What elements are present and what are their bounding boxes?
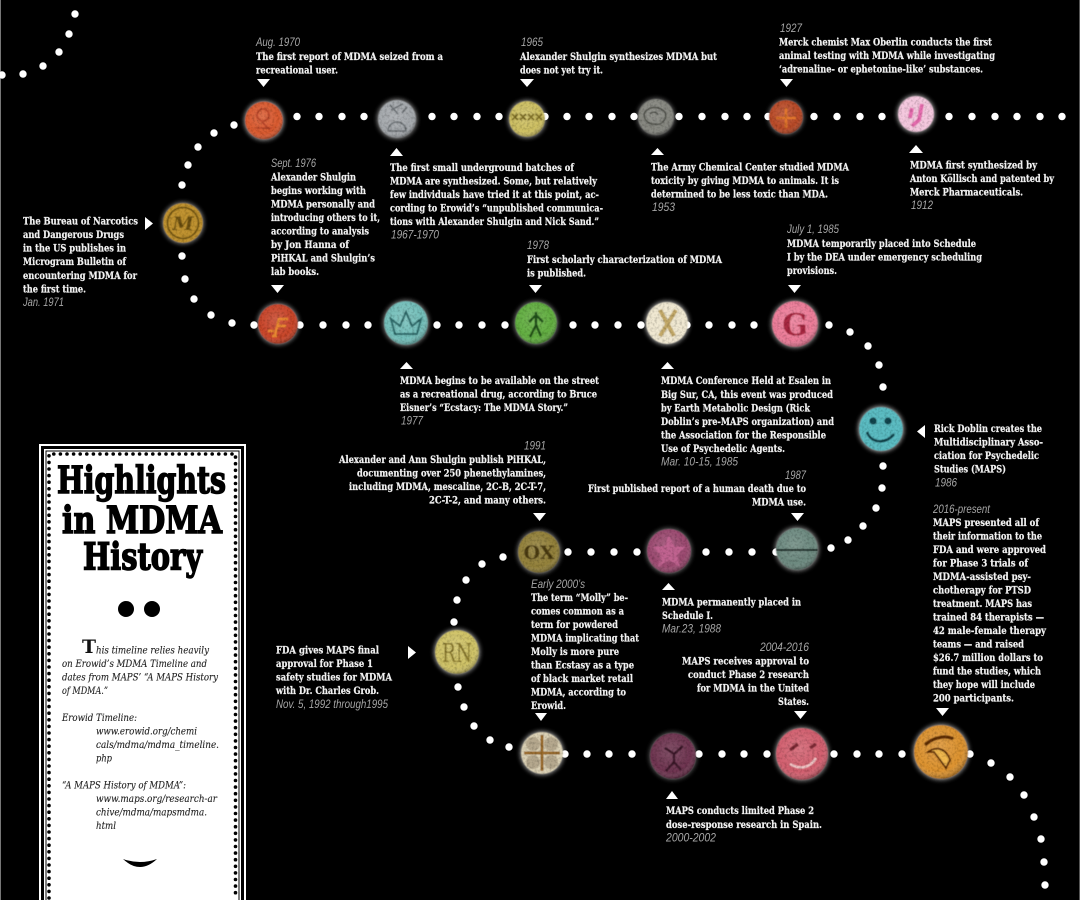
pill: teal smiley	[858, 406, 904, 452]
event: Jan. 1971: in the US publishes in	[23, 242, 126, 254]
event: Mar. 10-15, 1985	[661, 362, 835, 468]
pill: teal crown	[383, 300, 429, 346]
event: Mar. 10-15, 1985: Big Sur, CA, this event was produced	[661, 389, 834, 401]
event: Sept. 1976: introducing others to it,	[271, 212, 380, 224]
event: 1991: documenting over 250 phenethylamines,	[357, 468, 546, 480]
intro text: his timeline relies heavily	[96, 644, 210, 656]
event: 1912: Merck Pharmaceuticals.	[910, 186, 1023, 198]
event: 1965: 1965	[521, 35, 543, 49]
event: 1967-1970: cording to Erowid’s “unpublished communica-	[390, 202, 603, 214]
event: 1953: 1953	[652, 200, 675, 214]
event: 1967-1970: tions with Alexander Shulgin and Nick Sand.”	[390, 216, 599, 228]
title	[57, 458, 226, 578]
event: 1986: Multidisciplinary Asso-	[934, 436, 1043, 448]
event: 2004-2016: for MDMA in the United	[697, 682, 810, 694]
event: 1977: Eisner’s “Ecstacy: The MDMA Story.”	[400, 402, 568, 414]
event: Mar. 23, 1988: Schedule I.	[662, 610, 713, 622]
pill: cream X	[645, 301, 689, 345]
event: Aug. 1970: Aug. 1970	[255, 35, 300, 49]
pill: dark purple figure	[649, 732, 697, 780]
event: Aug. 1970: recreational user.	[256, 64, 338, 76]
source: Erowid timeline: www.erowid.org/chemi	[96, 726, 197, 738]
event: July 1, 1985: provisions.	[787, 265, 837, 277]
event: Early 2000's: Molly is more pure	[531, 646, 619, 658]
title: History	[83, 534, 203, 578]
event: Early 2000's: term for powdered	[531, 619, 619, 631]
event: 2016-present: treatment. MAPS has	[933, 598, 1032, 610]
event: 1986: 1986	[935, 476, 957, 490]
source: Erowid timeline: php	[96, 752, 112, 764]
event: Jan. 1971: encountering MDMA for	[23, 270, 137, 282]
event: 1967-1970: 1967-1970	[391, 228, 439, 242]
event: 1991: 1991	[524, 438, 546, 452]
icon: smile	[123, 859, 157, 867]
intro text: dates from MAPS’ “A MAPS History	[62, 672, 219, 684]
event: Mar. 10-15, 1985: Use of Psychedelic Agents.	[661, 443, 785, 455]
event: 2004-2016: conduct Phase 2 research	[688, 669, 809, 681]
event: 1927: ‘adrenaline- or ephetonine-like’ substances.	[779, 64, 983, 76]
event: 2004-2016	[682, 640, 810, 719]
event: 1986: Rick Doblin creates the	[934, 423, 1042, 435]
event: Sept. 1976	[270, 156, 380, 293]
event: 1927: Merck chemist Max Oberlin conducts the first	[779, 36, 992, 48]
event: Sept. 1976: MDMA personally and	[271, 198, 376, 210]
event: Nov. 5, 1992 through 1995	[275, 644, 416, 711]
pill: purple star	[646, 528, 692, 574]
event: 1965	[519, 35, 717, 87]
event: 2016-present: $26.7 million dollars to	[933, 652, 1043, 664]
pill: grey cat	[377, 99, 417, 139]
event: 1991: Alexander and Ann Shulgin publish PiHKAL,	[338, 454, 546, 466]
event: 1927	[779, 21, 996, 87]
pill: red cross	[768, 99, 804, 135]
source: A MAPS History of MDMA: html	[96, 820, 116, 832]
event: Jan. 1971: the first time.	[23, 284, 86, 296]
pill: yellow RN: RN	[442, 639, 472, 669]
event: 2016-present: teams — and raised	[933, 638, 1025, 650]
pill: olive OX	[517, 530, 561, 574]
event: Nov. 5, 1992 through 1995: approval for Phase 1	[276, 658, 373, 670]
event: 1987	[588, 468, 807, 521]
event: 1977	[400, 362, 599, 428]
event: 1967-1970: The first small underground batches of	[390, 162, 575, 174]
event: 1967-1970: MDMA are synthesized. Some, but relatively	[390, 176, 598, 188]
event: Mar. 10-15, 1985: Mar. 10-15, 1985	[661, 454, 738, 468]
event: 2000-2002: dose-response research in Spain.	[666, 819, 822, 831]
event: Aug. 1970: The first report of MDMA seized from a	[256, 51, 443, 63]
event: 1991: including MDMA, mescaline, 2C-B, 2C-T-7,	[349, 481, 546, 493]
event: Aug. 1970	[255, 35, 443, 87]
event: Early 2000's: MDMA implicating that	[531, 632, 639, 644]
event: 1965: Alexander Shulgin synthesizes MDMA but	[519, 51, 717, 63]
event: 1986: Studies (MAPS)	[934, 464, 1006, 476]
event: Nov. 5, 1992 through 1995: Nov. 5, 1992 through1995	[276, 697, 388, 711]
pill: gold M	[162, 202, 204, 244]
source: A MAPS History of MDMA: chive/mdma/mapsmdma.	[96, 806, 207, 818]
event: 1978: 1978	[527, 238, 549, 252]
event: 2016-present: for Phase 3 trials of	[933, 558, 1029, 570]
event: Mar. 10-15, 1985: Doblin’s pre-MAPS organization) and	[661, 416, 835, 428]
event: Sept. 1976: by Jon Hanna of	[271, 239, 350, 251]
panel: highlights in MDMA history	[39, 444, 246, 900]
event: Mar. 23, 1988: MDMA permanently placed in	[662, 596, 801, 608]
event: 2016-present: they hope will include	[933, 679, 1035, 691]
pill: grey-green scored	[775, 527, 819, 571]
event: 1978	[527, 238, 723, 293]
event: Nov. 5, 1992 through 1995: FDA gives MAPS final	[276, 644, 379, 656]
event: 2016-present: trained 84 therapists —	[933, 612, 1044, 624]
pill: orange dolphin	[913, 724, 969, 780]
event: 1977: 1977	[401, 414, 424, 428]
event: 1991	[338, 438, 546, 521]
pill: pink G	[771, 300, 819, 348]
pill: pink rabbit	[897, 95, 935, 133]
event: Nov. 5, 1992 through 1995: safety studies for MDMA	[276, 672, 393, 684]
icon: smiley eyes	[118, 601, 160, 617]
event: Nov. 5, 1992 through 1995: with Dr. Charles Grob.	[275, 685, 379, 697]
title: Highlights	[57, 458, 226, 502]
event: 1953: The Army Chemical Center studied MDMA	[651, 162, 850, 174]
event: 2000-2002: MAPS conducts limited Phase 2	[666, 805, 814, 817]
event: Early 2000's: comes common as a	[531, 606, 624, 618]
event: Jan. 1971: Microgram Bulletin of	[23, 256, 127, 268]
event: 2000-2002	[665, 791, 822, 844]
event: 1953	[651, 148, 850, 214]
event: 1967-1970	[390, 148, 603, 242]
pill: pink G: G	[782, 308, 808, 343]
event: Sept. 1976: lab books.	[271, 266, 319, 278]
pill: olive OX: OX	[524, 542, 555, 564]
pill: tan clover	[520, 731, 564, 775]
pill: orange music note	[257, 303, 299, 345]
event: 1912: 1912	[911, 198, 933, 212]
event: 1927: 1927	[780, 21, 803, 35]
source: Erowid timeline: cals/mdma/mdma_timeline.	[96, 739, 219, 751]
event: 1977: as a recreational drug, according to Bruce	[400, 388, 597, 400]
event: 1967-1970: few individuals have tried it at this point, ac-	[390, 189, 599, 201]
event: Jan. 1971: and Dangerous Drugs	[23, 229, 124, 241]
intro text	[62, 636, 219, 697]
event: 2016-present: chotherapy for PTSD	[933, 584, 1031, 596]
intro text: of MDMA.”	[62, 685, 108, 697]
event: 2004-2016: 2004-2016	[759, 640, 809, 654]
event: Early 2000's: Early 2000’s	[531, 577, 585, 591]
source: Erowid timeline: Erowid Timeline:	[61, 712, 137, 724]
event: 1912: MDMA first synthesized by	[910, 160, 1038, 172]
pill: gold M: M	[171, 213, 194, 235]
event: July 1, 1985: I by the DEA under emergency scheduling	[787, 252, 983, 264]
event: Early 2000's: The term “Molly” be-	[531, 592, 628, 604]
event: Early 2000's: of black market retail	[531, 673, 633, 685]
pill: yellow xxx	[508, 100, 546, 138]
event: Mar. 23, 1988: Mar.23, 1988	[662, 622, 721, 636]
event: Sept. 1976: Alexander Shulgin	[270, 172, 356, 184]
event: 1987: 1987	[785, 468, 807, 482]
event: 1977: MDMA begins to be available on the street	[400, 375, 599, 387]
event: Sept. 1976: begins working with	[271, 185, 366, 197]
event: 2016-present: their information to the	[933, 530, 1042, 542]
source: A MAPS History of MDMA	[62, 780, 218, 832]
event: Early 2000's: MDMA, according to	[531, 686, 626, 698]
event: Sept. 1976: Sept. 1976	[271, 156, 316, 170]
event: 2000-2002: 2000-2002	[665, 830, 716, 844]
event: 2016-present: 42 male-female therapy	[933, 625, 1047, 637]
event: 1927: animal testing with MDMA while investigating	[779, 50, 996, 62]
event: Early 2000's	[531, 577, 639, 721]
pill: pink-red face	[775, 727, 829, 781]
pill: yellow RN	[434, 629, 480, 675]
event: July 1, 1985: MDMA temporarily placed into Schedule	[787, 238, 976, 250]
event: Sept. 1976: according to analysis	[271, 226, 369, 238]
event: Jan. 1971: Jan. 1971	[22, 295, 64, 309]
event: 2016-present: FDA and were approved	[933, 544, 1047, 556]
source: A MAPS History of MDMA: “A MAPS History of MDMA”:	[62, 780, 186, 792]
event: 2016-present: 2016-present	[932, 502, 991, 516]
event: 1965: does not yet try it.	[520, 64, 603, 76]
event: 1986: ciation for Psychedelic	[934, 450, 1039, 462]
event: 2016-present: 200 participants.	[933, 692, 1014, 704]
event: 2016-present: MDMA-assisted psy-	[933, 571, 1031, 583]
event: 1953: toxicity by giving MDMA to animals. It is	[651, 175, 839, 187]
event: 1978: First scholarly characterization of MDMA	[527, 254, 723, 266]
event: 1987: MDMA use.	[752, 496, 806, 508]
event: 1987: First published report of a human death due to	[588, 483, 806, 495]
event: 2016-present	[932, 502, 1047, 716]
event: 1953: determined to be less toxic than MDA.	[651, 188, 828, 200]
event: 1991: 2C-T-2, and many others.	[429, 494, 546, 506]
pill: grey emblem	[637, 98, 675, 136]
title: in MDMA	[62, 498, 223, 542]
event: 2004-2016: States.	[778, 696, 809, 708]
intro text: T	[82, 636, 96, 658]
source: Erowid timeline	[61, 712, 219, 764]
event: Mar. 10-15, 1985: MDMA Conference Held at Esalen in	[661, 375, 831, 387]
event: July 1, 1985: July 1, 1985	[786, 222, 839, 236]
event: Early 2000's: than Ecstasy as a type	[531, 660, 634, 672]
event: Mar. 23, 1988	[662, 583, 801, 636]
event: 1986	[917, 423, 1043, 490]
pill: green figure	[514, 301, 558, 345]
event: Jan. 1971: The Bureau of Narcotics	[23, 216, 138, 228]
event: July 1, 1985	[786, 222, 983, 293]
event: 2004-2016: MAPS receives approval to	[682, 656, 809, 668]
event: 1978: is published.	[527, 268, 586, 280]
event: 2016-present: fund the studies, which	[933, 666, 1041, 678]
event: Mar. 10-15, 1985: the Association for the Responsible	[661, 430, 826, 442]
event: 2016-present: MAPS presented all of	[933, 517, 1040, 529]
event: Sept. 1976: PiHKAL and Shulgin’s	[271, 252, 375, 264]
source: A MAPS History of MDMA: www.maps.org/research-ar	[96, 793, 218, 805]
event: 1912	[909, 145, 1055, 212]
event: Mar. 10-15, 1985: by Earth Metabolic Design (Rick	[661, 402, 811, 414]
intro text: on Erowid’s MDMA Timeline and	[62, 658, 207, 670]
pill: orange logo	[244, 100, 284, 140]
event: Early 2000's: Erowid.	[531, 700, 566, 712]
event: Jan. 1971	[22, 216, 153, 309]
